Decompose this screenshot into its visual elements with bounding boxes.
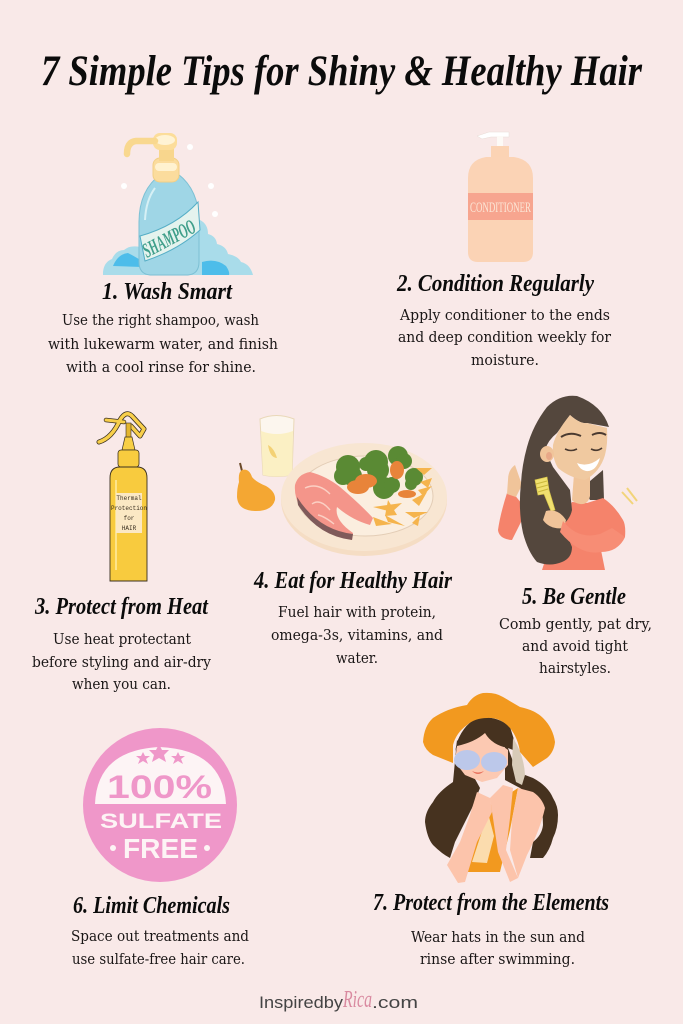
heading: 6. Limit Chemicals — [73, 893, 230, 919]
heading: 4. Eat for Healthy Hair — [253, 568, 453, 594]
lace scarf — [512, 738, 525, 785]
text block: Fuel hair with protein, — [278, 603, 436, 621]
icon: woman with sun hat — [423, 693, 558, 883]
icon: sulfate free badge: SULFATE — [100, 810, 222, 833]
text block — [411, 928, 585, 968]
text block: Comb gently, pat dry, — [499, 615, 652, 633]
hair top — [455, 717, 518, 752]
footer logo — [259, 987, 418, 1013]
glass of lemon water — [260, 416, 294, 476]
mouth — [472, 771, 484, 774]
text block: with a cool rinse for shine. — [66, 358, 256, 376]
icon: conditioner bottle: CONDITIONER — [470, 200, 531, 216]
sunglasses — [454, 750, 480, 770]
icon: conditioner bottle — [468, 132, 533, 262]
icon: shampoo bottle — [103, 133, 253, 275]
icon: sulfate free badge — [83, 728, 237, 882]
text block — [48, 311, 278, 376]
text block: Space out treatments and — [71, 927, 249, 945]
potato wedges — [373, 468, 432, 526]
hat — [423, 693, 555, 767]
plate — [281, 444, 447, 556]
heading: 5. Be Gentle — [522, 584, 626, 610]
arms and shoulder — [447, 785, 545, 883]
footer logo: Inspiredby — [259, 993, 344, 1012]
panel: tip 2 condition regularly — [396, 132, 612, 369]
icon: heat protectant spray: Thermal — [116, 495, 142, 502]
text block: before styling and air-dry — [32, 653, 211, 671]
text block: omega-3s, vitamins, and — [271, 626, 443, 644]
icon: heat protectant spray: for — [124, 515, 135, 522]
icon: woman combing hair — [498, 396, 637, 570]
icon: sulfate free badge: FREE — [123, 833, 198, 864]
pear — [237, 463, 275, 511]
panel: tip 5 be gentle — [498, 396, 652, 677]
text block — [71, 927, 249, 968]
salmon steak — [295, 472, 373, 540]
text block: rinse after swimming. — [420, 950, 575, 968]
text block: use sulfate-free hair care. — [72, 950, 245, 968]
icon: heat protectant spray: HAIR — [122, 525, 137, 532]
heading: 3. Protect from Heat — [34, 594, 209, 620]
icon: shampoo bottle: SHAMPOO — [138, 214, 200, 262]
text block: Use the right shampoo, wash — [62, 311, 259, 329]
footer logo: .com — [372, 993, 418, 1012]
text block: moisture. — [471, 351, 539, 369]
text block: and deep condition weekly for — [398, 328, 612, 346]
hair — [425, 740, 558, 858]
face — [455, 733, 508, 782]
text block — [398, 306, 612, 369]
text block: water. — [336, 649, 378, 667]
icon: sulfate free badge: 100% — [107, 769, 212, 805]
text block: with lukewarm water, and finish — [48, 335, 278, 353]
panel: tip 7 protect from the elements — [373, 693, 609, 968]
text block — [271, 603, 443, 667]
orange top and scarf — [467, 788, 518, 872]
text block — [32, 630, 211, 693]
text block: when you can. — [72, 675, 171, 693]
icon: heat protectant spray — [99, 414, 147, 581]
icon: heat protectant spray: Protection — [111, 505, 147, 512]
carrots — [347, 461, 416, 498]
text block — [499, 615, 652, 677]
heading: 2. Condition Regularly — [396, 271, 594, 297]
icon: healthy meal — [237, 416, 447, 556]
panel: tip 1 wash smart — [48, 133, 278, 376]
panel: tip 3 protect from heat — [32, 414, 211, 693]
text block: Use heat protectant — [53, 630, 191, 648]
panel: tip 4 eat for healthy hair — [237, 416, 453, 667]
panel: tip 6 limit chemicals — [71, 728, 249, 968]
text block: and avoid tight — [522, 637, 628, 655]
heading: 7. Protect from the Elements — [373, 890, 609, 916]
heading: 1. Wash Smart — [102, 279, 233, 305]
footer logo: Rica — [342, 987, 372, 1013]
text block: Apply conditioner to the ends — [399, 306, 610, 324]
text block: hairstyles. — [539, 659, 611, 677]
broccoli — [334, 446, 423, 499]
text block: Wear hats in the sun and — [411, 928, 585, 946]
